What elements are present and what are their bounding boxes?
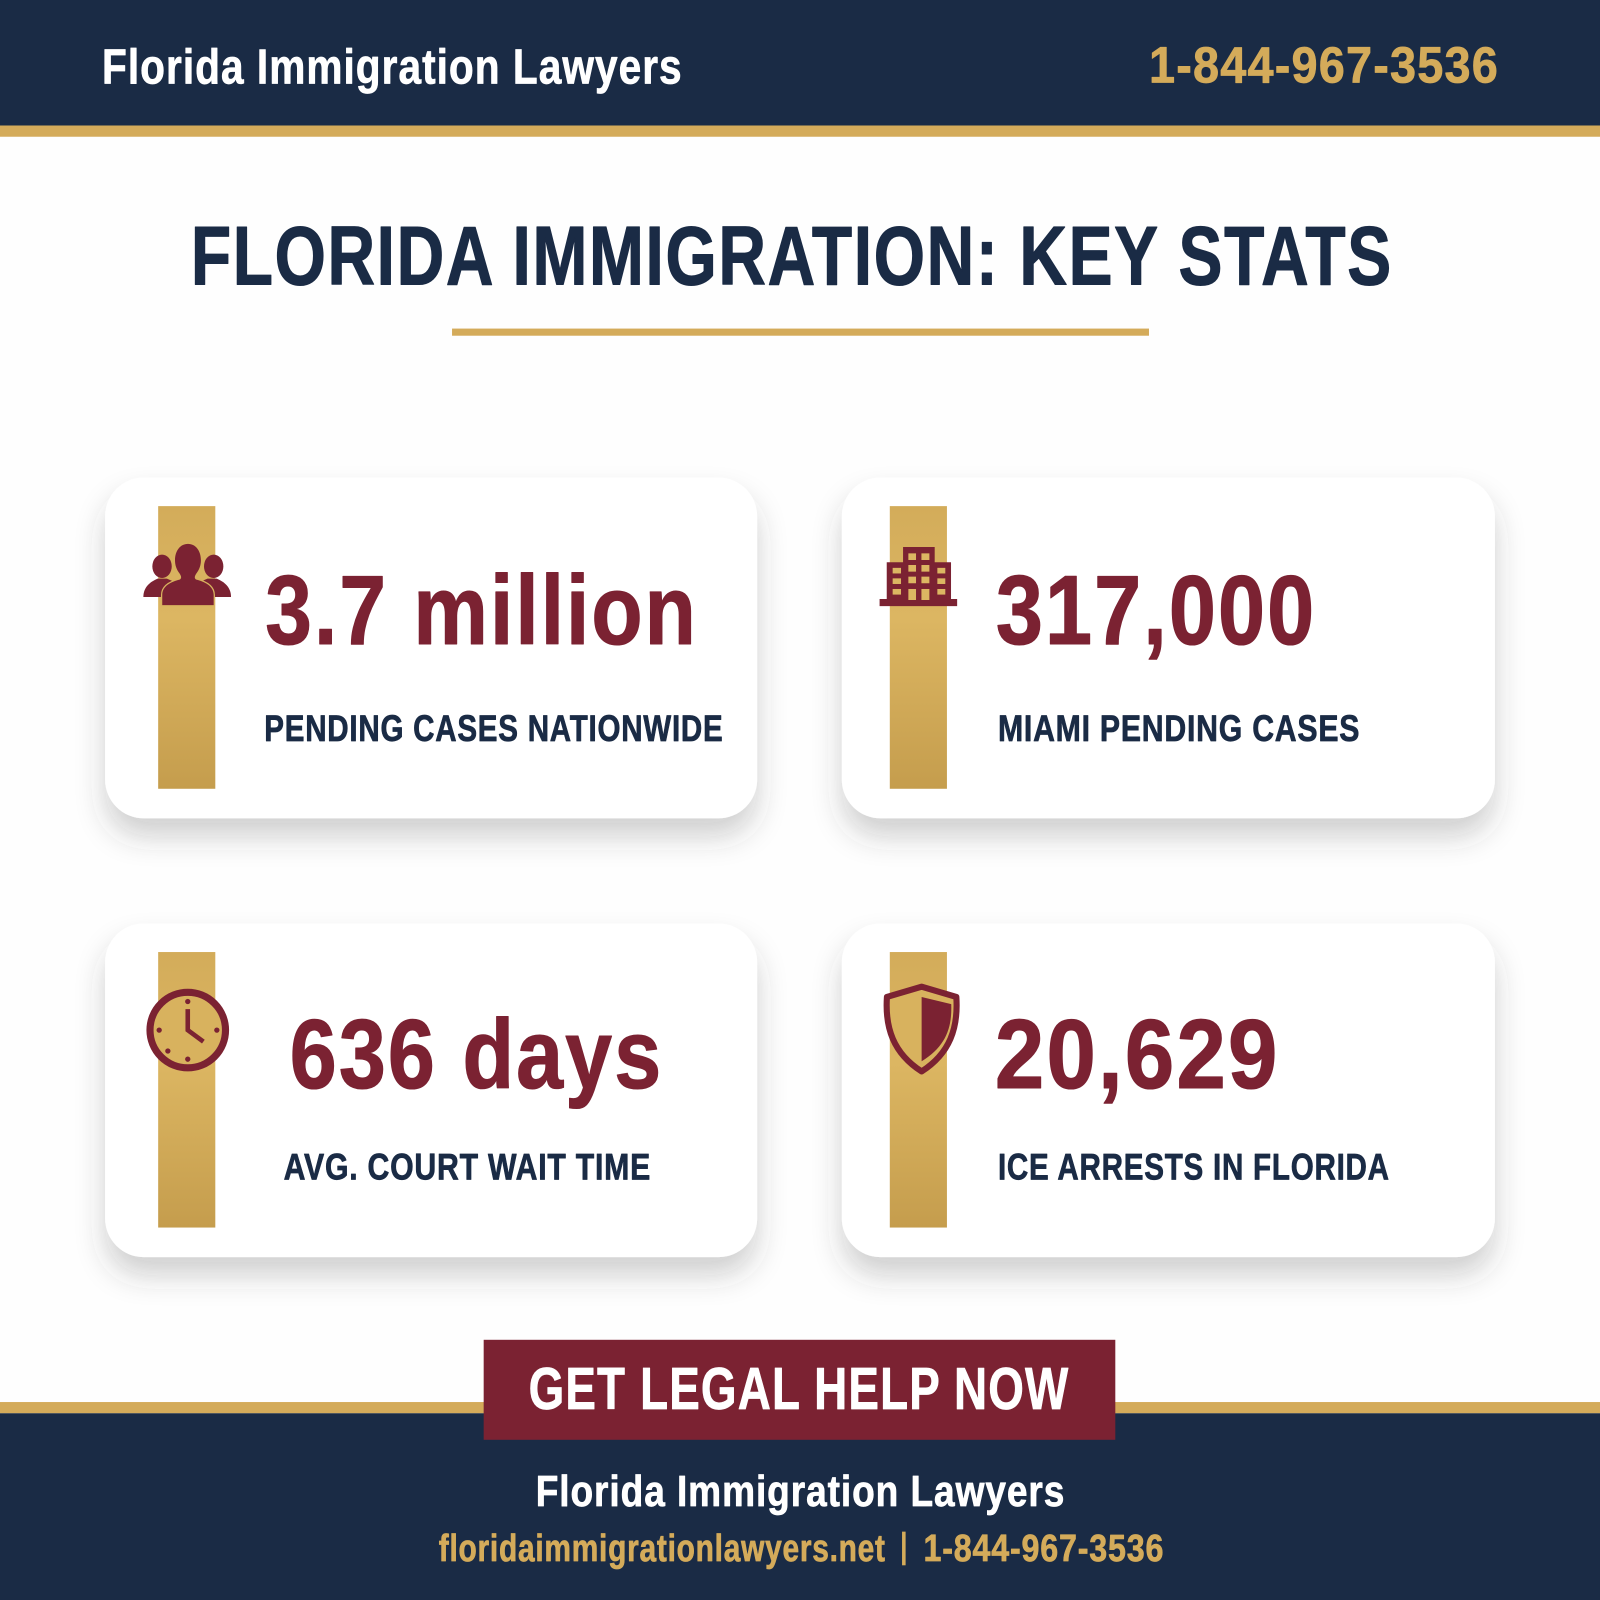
panel: court wait time [105,923,757,1257]
icon: building [880,547,957,606]
statistic label: MIAMI PENDING CASES [998,708,1360,749]
header firm name: Florida Immigration Lawyers [102,41,683,95]
header phone number: 1-844-967-3536 [1149,37,1499,94]
icon: clock [150,992,226,1068]
panel: pending cases nationwide [105,478,757,818]
button label: GET LEGAL HELP NOW [529,1355,1069,1422]
header band [0,0,1600,137]
statistic: 3.7 million [265,555,698,665]
footer website: floridaimmigrationlawyers.net [439,1527,886,1569]
panel: Miami pending cases [842,478,1495,818]
statistic label: AVG. COURT WAIT TIME [284,1147,651,1188]
footer separator [902,1532,906,1565]
footer band [0,1402,1600,1600]
footer phone number: 1-844-967-3536 [923,1527,1164,1569]
statistic: 636 days [290,999,663,1109]
icon: shield [887,987,957,1071]
title underline [452,329,1149,336]
icon: people [143,544,231,605]
statistic: 317,000 [996,555,1316,665]
statistic label: PENDING CASES NATIONWIDE [264,708,723,749]
footer firm name: Florida Immigration Lawyers [536,1467,1065,1516]
call to action button [484,1340,1115,1440]
statistic: 20,629 [995,999,1280,1109]
statistic label: ICE ARRESTS IN FLORIDA [998,1147,1390,1188]
panel: ICE arrests [842,923,1495,1257]
